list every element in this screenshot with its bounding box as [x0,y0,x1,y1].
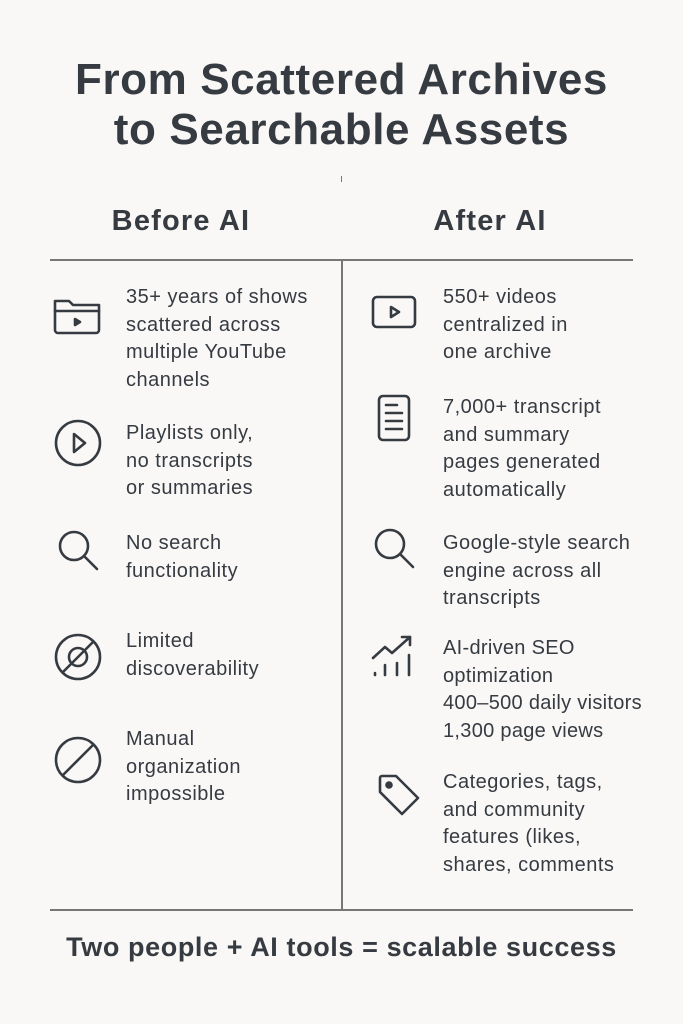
text: discoverability [126,630,259,680]
footer: Two people + AI tools = scalable success [66,932,617,962]
text: videos [443,286,568,363]
text: playlists: or summaries [126,477,253,499]
text: discoverability: Limited [126,630,194,652]
text: discoverability: discoverability [126,658,259,680]
text: no search [126,532,238,582]
text: no search: No search [126,532,222,554]
text: shows scattered [126,286,308,390]
icon: play circle [54,420,102,466]
text: transcripts: 7,000+ transcript [443,396,601,418]
panel: after [372,286,642,876]
text: shows scattered: scattered across [126,314,281,336]
text: shows scattered: channels [126,368,210,390]
icon: document [378,394,410,442]
text: SEO: optimization [443,664,553,686]
text: playlists: Playlists only, [126,422,253,444]
heading: before: Before AI [112,205,250,237]
text: no search: functionality [126,560,238,582]
text: playlists [126,422,253,499]
icon: folder play [54,300,100,334]
text: shows scattered: multiple YouTube [126,341,287,363]
text: community: and community [443,798,585,820]
text: search engine [443,532,630,609]
text: transcripts: and summary [443,424,570,446]
text: community: Categories, tags, [443,771,603,793]
text: transcripts [443,396,601,500]
text: videos: one archive [443,341,552,363]
text: search engine: Google-style search [443,532,630,554]
panel: before [54,286,308,805]
icon: tag [378,774,420,816]
title: From Scattered Archives [75,55,608,104]
icon: video [372,296,416,328]
icon: growth chart [372,636,412,676]
text: manual: Manual [126,728,195,750]
text: playlists: no transcripts [126,450,253,472]
text: manual [126,728,241,805]
title: to Searchable Assets [114,105,569,154]
text: manual: organization [126,756,241,778]
text: search engine: engine across all [443,560,602,582]
text: community: features (likes, [443,826,581,848]
text: transcripts: automatically [443,478,566,500]
text: shows scattered: 35+ years of shows [126,286,308,308]
text: videos: 550+ videos [443,286,557,308]
icon: no visibility [54,634,102,680]
text: search engine: transcripts [443,587,541,609]
text: manual: impossible [126,783,225,805]
icon: prohibited [54,736,102,784]
text: community [443,771,614,876]
text: videos: centralized in [443,314,568,336]
icon: search [374,528,414,568]
text: SEO: AI-driven SEO [443,637,575,659]
title [75,55,608,154]
text: community: shares, comments [443,854,614,876]
text: transcripts: pages generated [443,451,601,473]
heading: after: After AI [433,205,547,237]
text: SEO: 1,300 page views [443,720,603,742]
icon: search [58,530,98,570]
text: SEO: 400–500 daily visitors [443,692,642,714]
text: SEO [443,637,642,742]
